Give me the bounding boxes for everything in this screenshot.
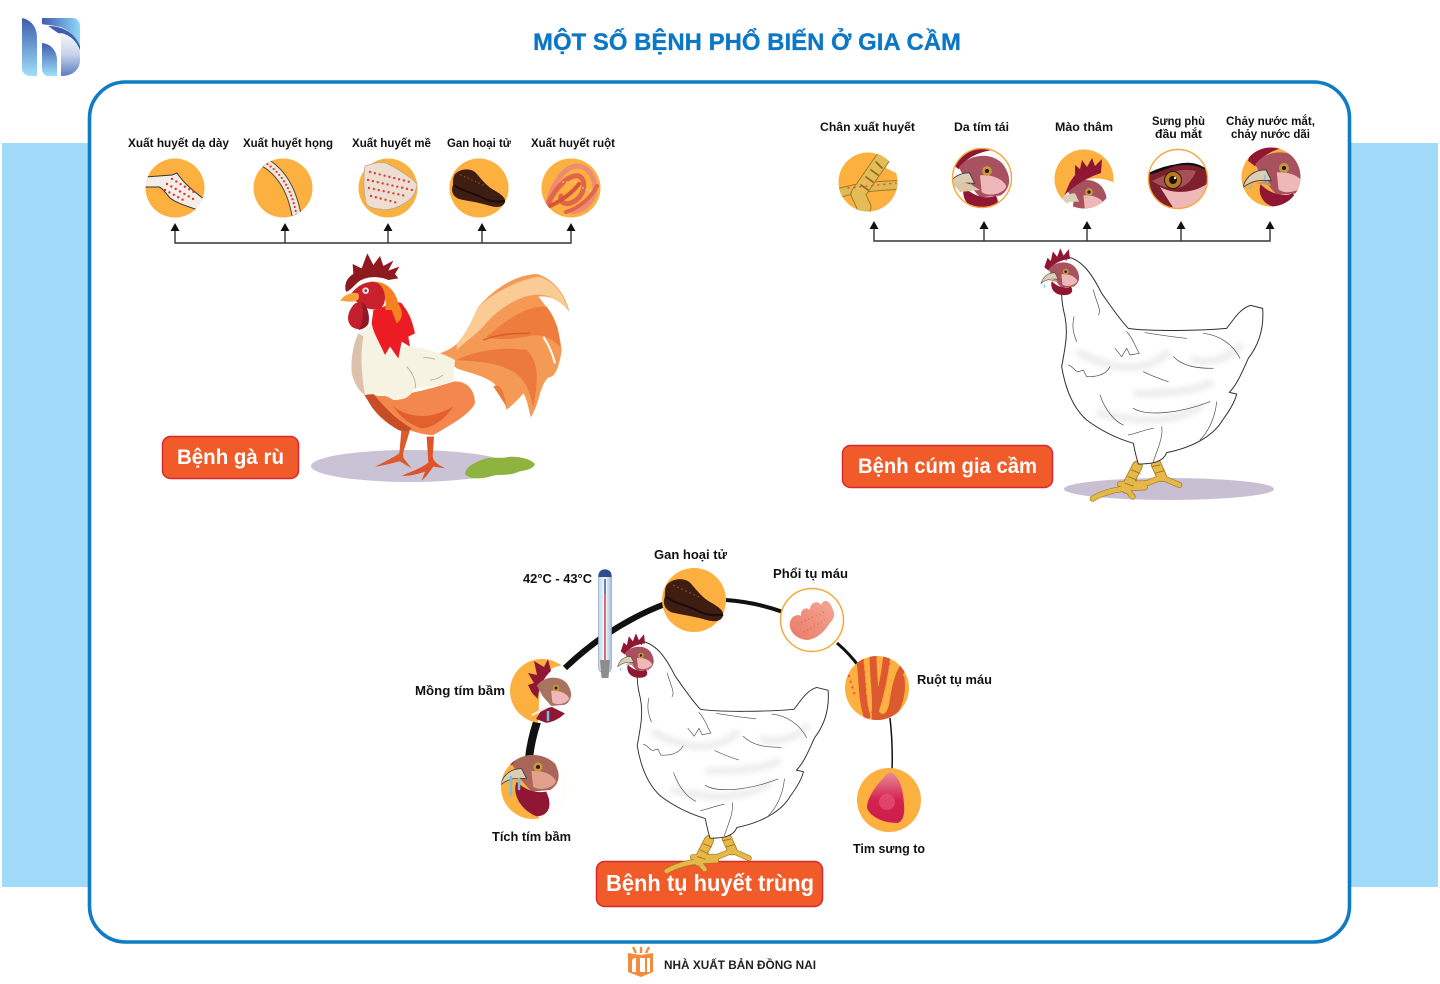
symptom label: temperature: 42°C - 43°C xyxy=(523,571,593,586)
background band xyxy=(2,143,1438,887)
icon: cyanotic skin xyxy=(952,148,1012,208)
symptom label: gan hoại tử: Gan hoại tử xyxy=(654,547,728,562)
logo xyxy=(22,18,80,76)
icon: dark comb xyxy=(1054,150,1114,208)
illustration: white hen xyxy=(1041,248,1263,499)
icon: liver xyxy=(450,158,508,218)
title: MỘT SỐ BỆNH PHỔ BIẾN Ở GIA CẦM xyxy=(533,27,961,56)
panel: bệnh cúm gia cầm xyxy=(820,113,1315,500)
symptom label: chảy nước mắt, chảy nước dãi: chảy nước dãi xyxy=(1231,127,1310,141)
illustration: shadow under rooster xyxy=(311,450,509,482)
icon: purple comb xyxy=(510,659,576,725)
symptom label: chảy nước mắt, chảy nước dãi xyxy=(1226,113,1315,141)
arrows: connector tree xyxy=(170,223,576,243)
icon: thermometer xyxy=(598,570,612,678)
icon: swollen eye xyxy=(1148,150,1208,209)
icon: purple wattle xyxy=(501,755,565,819)
symptom label: da tím tái: Da tím tái xyxy=(954,120,1009,134)
symptom label: ruột tụ máu: Ruột tụ máu xyxy=(917,672,992,687)
symptom label: gan hoại tử: Gan hoại tử xyxy=(447,136,511,150)
footer: publisher logo xyxy=(628,947,653,977)
symptom label: xuất huyết dạ dày: Xuất huyết dạ dày xyxy=(128,136,229,150)
symptom label: sưng phù đầu mắt xyxy=(1152,114,1205,141)
illustration: white hen xyxy=(618,633,828,871)
icon: stomach xyxy=(145,158,205,218)
symptom label: xuất huyết ruột: Xuất huyết ruột xyxy=(531,136,615,150)
symptom label: tim sưng to: Tim sưng to xyxy=(853,841,925,856)
illustration: droppings xyxy=(465,457,535,478)
symptom label: chảy nước mắt, chảy nước dãi: Chảy nước mắt, xyxy=(1226,113,1315,128)
illustration: rooster xyxy=(340,253,569,481)
label: bệnh tụ huyết trùng: Bệnh tụ huyết trùng xyxy=(606,870,814,896)
symptom label: sưng phù đầu mắt: đầu mắt xyxy=(1155,126,1202,141)
footer: publisher name: NHÀ XUẤT BẢN ĐỒNG NAI xyxy=(664,957,816,972)
label: bệnh gà rù xyxy=(162,436,298,478)
panel: bệnh tụ huyết trùng xyxy=(415,547,992,906)
icon: heart xyxy=(857,768,921,832)
label: bệnh cúm gia cầm: Bệnh cúm gia cầm xyxy=(858,455,1037,478)
label: bệnh cúm gia cầm xyxy=(842,446,1052,488)
symptom label: sưng phù đầu mắt: Sưng phù xyxy=(1152,114,1205,128)
symptom label: mào thâm: Mào thâm xyxy=(1055,120,1113,134)
icon: intestine congestion xyxy=(845,654,909,722)
illustration: shadow under hen xyxy=(1064,478,1274,500)
symptom label: phổi tụ máu: Phổi tụ máu xyxy=(773,566,848,581)
icon: intestine xyxy=(542,158,600,218)
arrows: connector tree xyxy=(870,221,1274,241)
arc connector xyxy=(529,600,892,770)
icon: lung xyxy=(780,588,844,652)
icon: throat xyxy=(254,158,312,218)
symptom label: xuất huyết họng: Xuất huyết họng xyxy=(243,136,333,150)
panel: bệnh gà rù xyxy=(128,136,615,482)
symptom label: mồng tím bầm: Mồng tím bầm xyxy=(415,683,505,698)
symptom label: xuất huyết mề: Xuất huyết mề xyxy=(352,136,431,150)
symptom label: tích tím bầm: Tích tím bầm xyxy=(492,829,571,844)
main rounded panel xyxy=(90,82,1350,942)
icon: tearing and drooling xyxy=(1242,148,1300,206)
symptom label: chân xuất huyết: Chân xuất huyết xyxy=(820,120,915,134)
icon: chicken feet xyxy=(838,152,898,212)
label: bệnh tụ huyết trùng xyxy=(596,862,822,906)
icon: gizzard xyxy=(358,158,418,218)
icon: liver xyxy=(662,568,726,632)
label: bệnh gà rù: Bệnh gà rù xyxy=(177,446,284,469)
